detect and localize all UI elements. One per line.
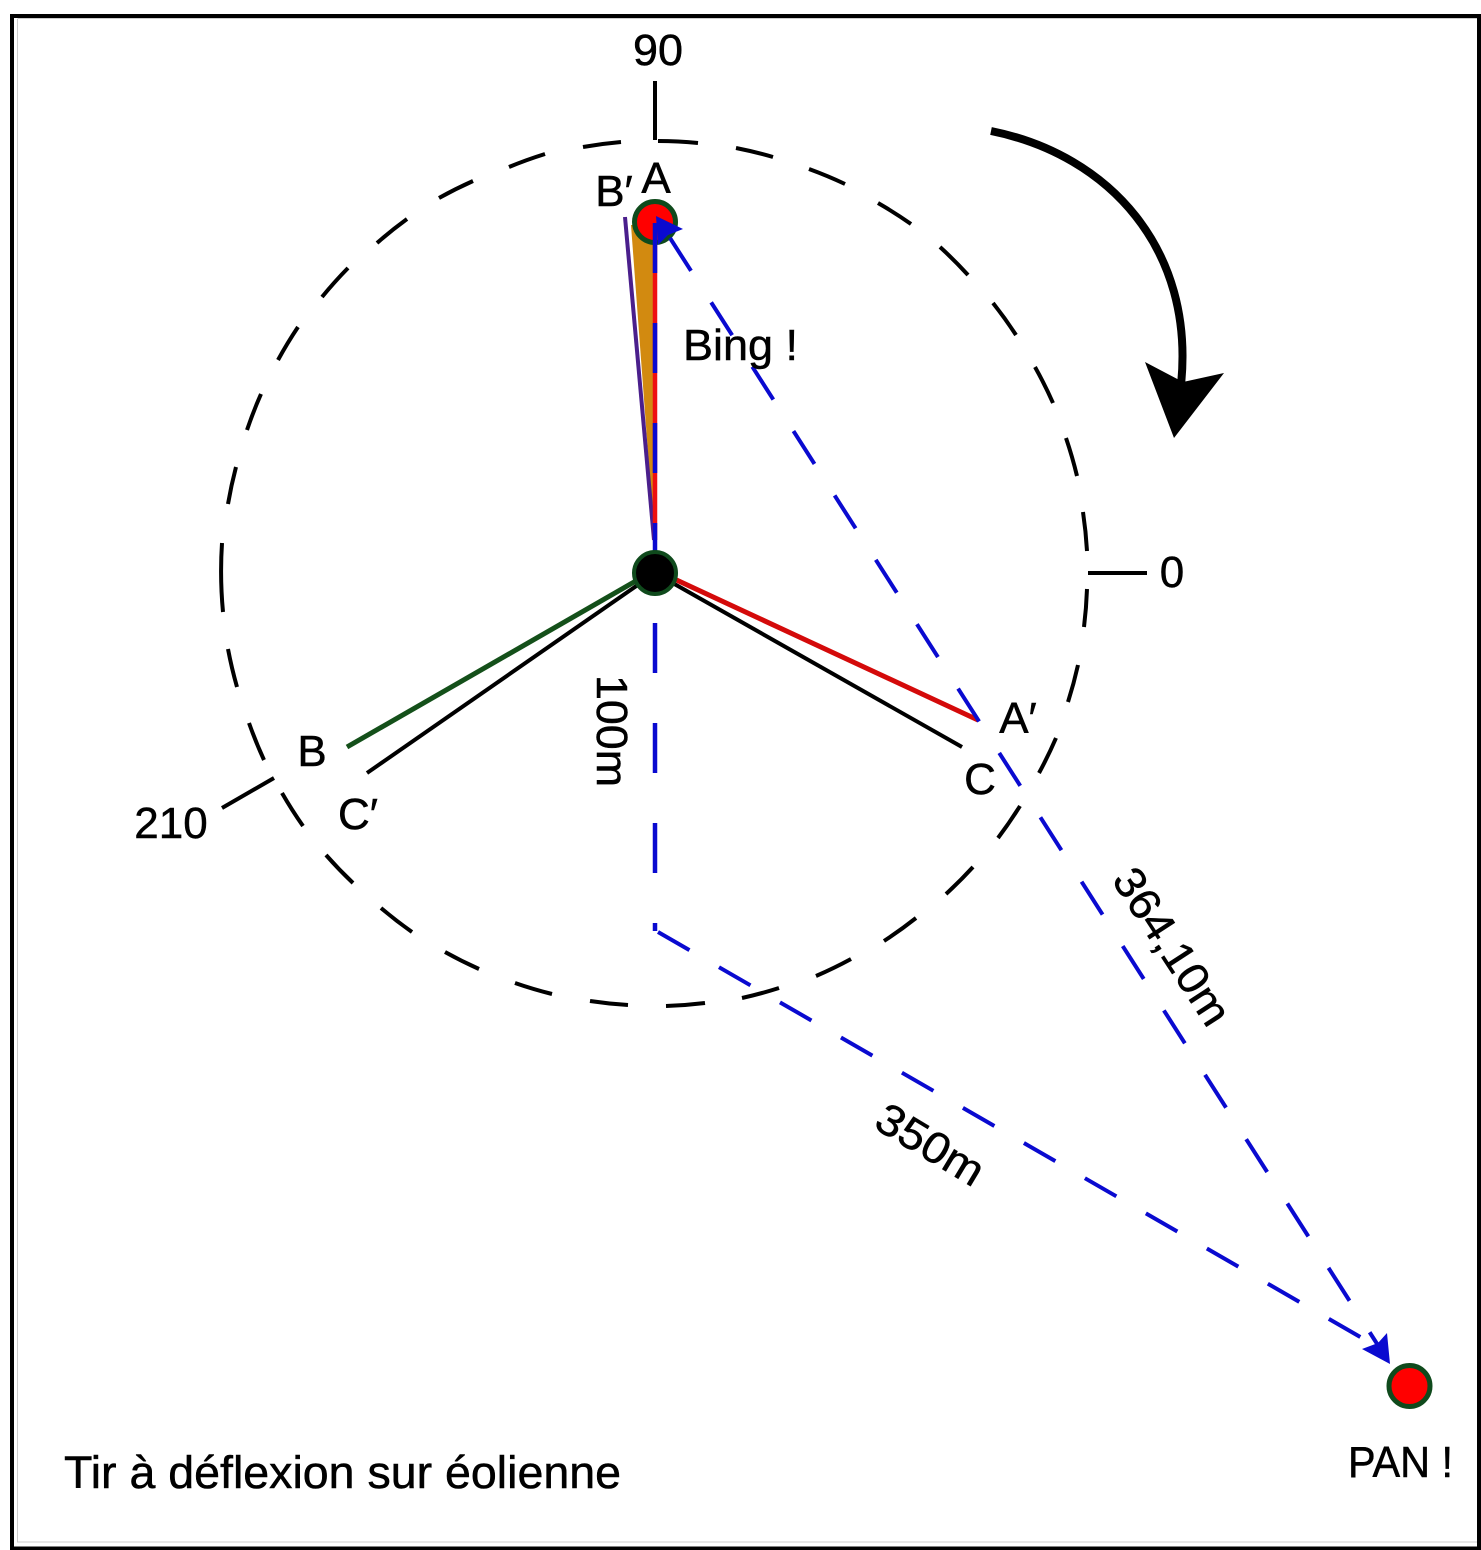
tick and label: 0: 0 (1160, 548, 1184, 597)
label 364,10m: 364,10m (1103, 859, 1241, 1035)
blue arrowhead at A (656, 216, 683, 245)
label 350m: 350m (867, 1094, 993, 1196)
label Bing: Bing ! (683, 321, 798, 370)
label PAN: PAN ! (1348, 1438, 1453, 1487)
dashed rotor circle (221, 141, 1087, 1006)
blue dashed path: hub vertical 100m (653, 223, 657, 931)
label B': B′ (595, 167, 633, 216)
orange deflection wedge (631, 225, 653, 520)
target A marker (634, 202, 676, 242)
black blade line to C (655, 573, 962, 747)
tick and label: 0 (1088, 548, 1184, 597)
label C': C′ (338, 790, 378, 839)
label B: B (297, 727, 327, 776)
caption: Tir à déflexion sur éolienne (64, 1447, 621, 1498)
label 100m: 100m (587, 675, 636, 787)
tick and label: 90: 90 (633, 26, 683, 75)
hub (634, 552, 676, 594)
label A: A (641, 154, 671, 203)
purple blade line B' (625, 217, 654, 540)
red blade line to A (653, 225, 657, 540)
blue arrowhead at PAN (1362, 1333, 1390, 1364)
target PAN marker (1389, 1366, 1430, 1406)
blue dashed path: 350m to PAN (658, 932, 1362, 1338)
green blade line to B (347, 570, 655, 747)
red blade line to A' (655, 570, 978, 720)
label C: C (964, 755, 996, 804)
blue dashed path: 364,10m (670, 238, 1381, 1350)
tick and label: 210: 210 (134, 799, 208, 848)
label A': A′ (999, 694, 1037, 743)
rotation arrow (991, 131, 1224, 438)
tick and label: 90 (633, 26, 683, 140)
black blade line to C' (367, 573, 655, 773)
tick and label: 210 (134, 778, 274, 848)
